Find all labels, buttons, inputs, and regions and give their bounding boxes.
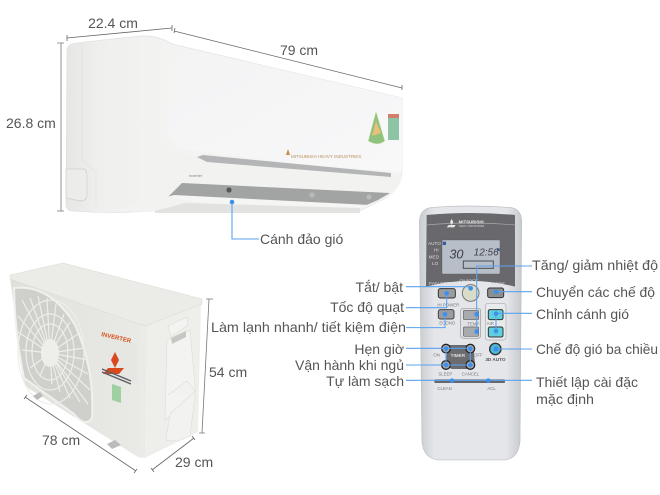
side face [145, 302, 201, 458]
front panel [168, 44, 402, 172]
remote small labels: CLEAN [437, 386, 452, 391]
remote fan labels: ON/OFF [459, 278, 478, 284]
outdoor unit [10, 263, 202, 458]
right labels: mặc định [536, 391, 594, 407]
fan grille [14, 288, 92, 422]
remote fan labels: HI [434, 248, 439, 253]
remote small labels: ACL [487, 386, 496, 391]
left labels [211, 279, 406, 389]
remote fan labels: MODE [491, 282, 505, 287]
remote fan labels: LO [432, 261, 439, 266]
dimension: 79 cm: 79 cm [280, 42, 318, 58]
remote LCD: 12:56 [474, 248, 499, 259]
indoor unit: inverter [189, 173, 203, 178]
brand plate: INVERTER [101, 332, 132, 345]
right labels: Chỉnh cánh gió [536, 306, 629, 322]
remote fan labels: AUTO [428, 241, 441, 246]
remote fan labels [428, 241, 505, 287]
remote logo: HEAVY INDUSTRIES [459, 224, 484, 228]
dimension: 26.8 cm: 26.8 cm [6, 115, 56, 131]
left labels: Vận hành khi ngủ [295, 357, 404, 373]
brand: MITSUBISHI HEAVY INDUSTRIES [291, 154, 361, 159]
remote LCD [442, 240, 500, 274]
remote fan labels: MED [429, 254, 440, 259]
remote callout dots [443, 286, 499, 383]
remote logo: MITSUBISHI [459, 220, 484, 225]
dimension: 22.4 cm [67, 15, 172, 41]
remote top panel [426, 213, 515, 287]
remote fan labels: FAN SPEED [429, 281, 457, 287]
remote small labels: AIR [487, 321, 494, 326]
left labels: Tự làm sạch [326, 373, 404, 389]
remote small labels: 3D AUTO [485, 357, 506, 362]
remote small labels [433, 303, 506, 391]
air vent [197, 155, 391, 177]
energy label triangle [368, 111, 385, 144]
remote logo [447, 219, 484, 228]
brand [286, 149, 361, 159]
remote small labels: TEMP [467, 321, 479, 326]
remote small labels: ECONO [439, 320, 456, 325]
dimension: 26.8 cm [6, 43, 64, 211]
pivots [226, 187, 232, 193]
energy sticker [112, 384, 121, 403]
callout: Cánh đảo gió [230, 200, 344, 247]
remote control [406, 206, 532, 460]
front face [10, 278, 147, 458]
louver blade [167, 195, 370, 209]
dimension: 54 cm: 54 cm [209, 364, 247, 380]
dimension: 22.4 cm: 22.4 cm [88, 15, 138, 31]
dimension: 29 cm [151, 436, 213, 472]
dimension: 79 cm [174, 28, 402, 90]
lower body [115, 141, 402, 212]
left labels: Tốc độ quạt [330, 299, 404, 315]
indoor unit [66, 36, 402, 213]
right labels: Chuyển các chế độ [536, 284, 655, 300]
callout: Cánh đảo gió: Cánh đảo gió [260, 231, 344, 247]
right labels [532, 257, 658, 407]
remote small labels: SLEEP [438, 371, 452, 376]
remote small labels: OFF [474, 352, 483, 357]
remote LCD: 30 [449, 247, 463, 261]
remote small labels: ON [433, 352, 440, 357]
louver opening [168, 183, 390, 207]
dimension: 78 cm [24, 395, 137, 473]
side handle [165, 317, 195, 420]
remote buttons [434, 285, 506, 383]
dimension: 29 cm: 29 cm [175, 454, 213, 470]
dimension: 54 cm [199, 299, 247, 433]
right labels: Thiết lập cài đặc [536, 374, 638, 390]
remote callout lines [406, 266, 532, 380]
remote small labels: HI POWER [437, 303, 459, 308]
dimension: 78 cm: 78 cm [42, 432, 80, 448]
right labels: Tăng/ giảm nhiệt độ [532, 257, 658, 273]
left labels: Hẹn giờ [354, 341, 404, 357]
brand plate [97, 330, 137, 384]
remote small labels: CANCEL [462, 371, 480, 376]
top [10, 263, 202, 325]
left labels: Làm lạnh nhanh/ tiết kiệm điện [211, 319, 406, 335]
energy label rect [388, 114, 399, 140]
side cap [66, 169, 87, 201]
right labels: Chế độ gió ba chiều [536, 341, 658, 357]
feet [33, 392, 43, 400]
left labels: Tắt/ bật [356, 279, 403, 295]
remote small labels: TIMER [451, 353, 466, 358]
